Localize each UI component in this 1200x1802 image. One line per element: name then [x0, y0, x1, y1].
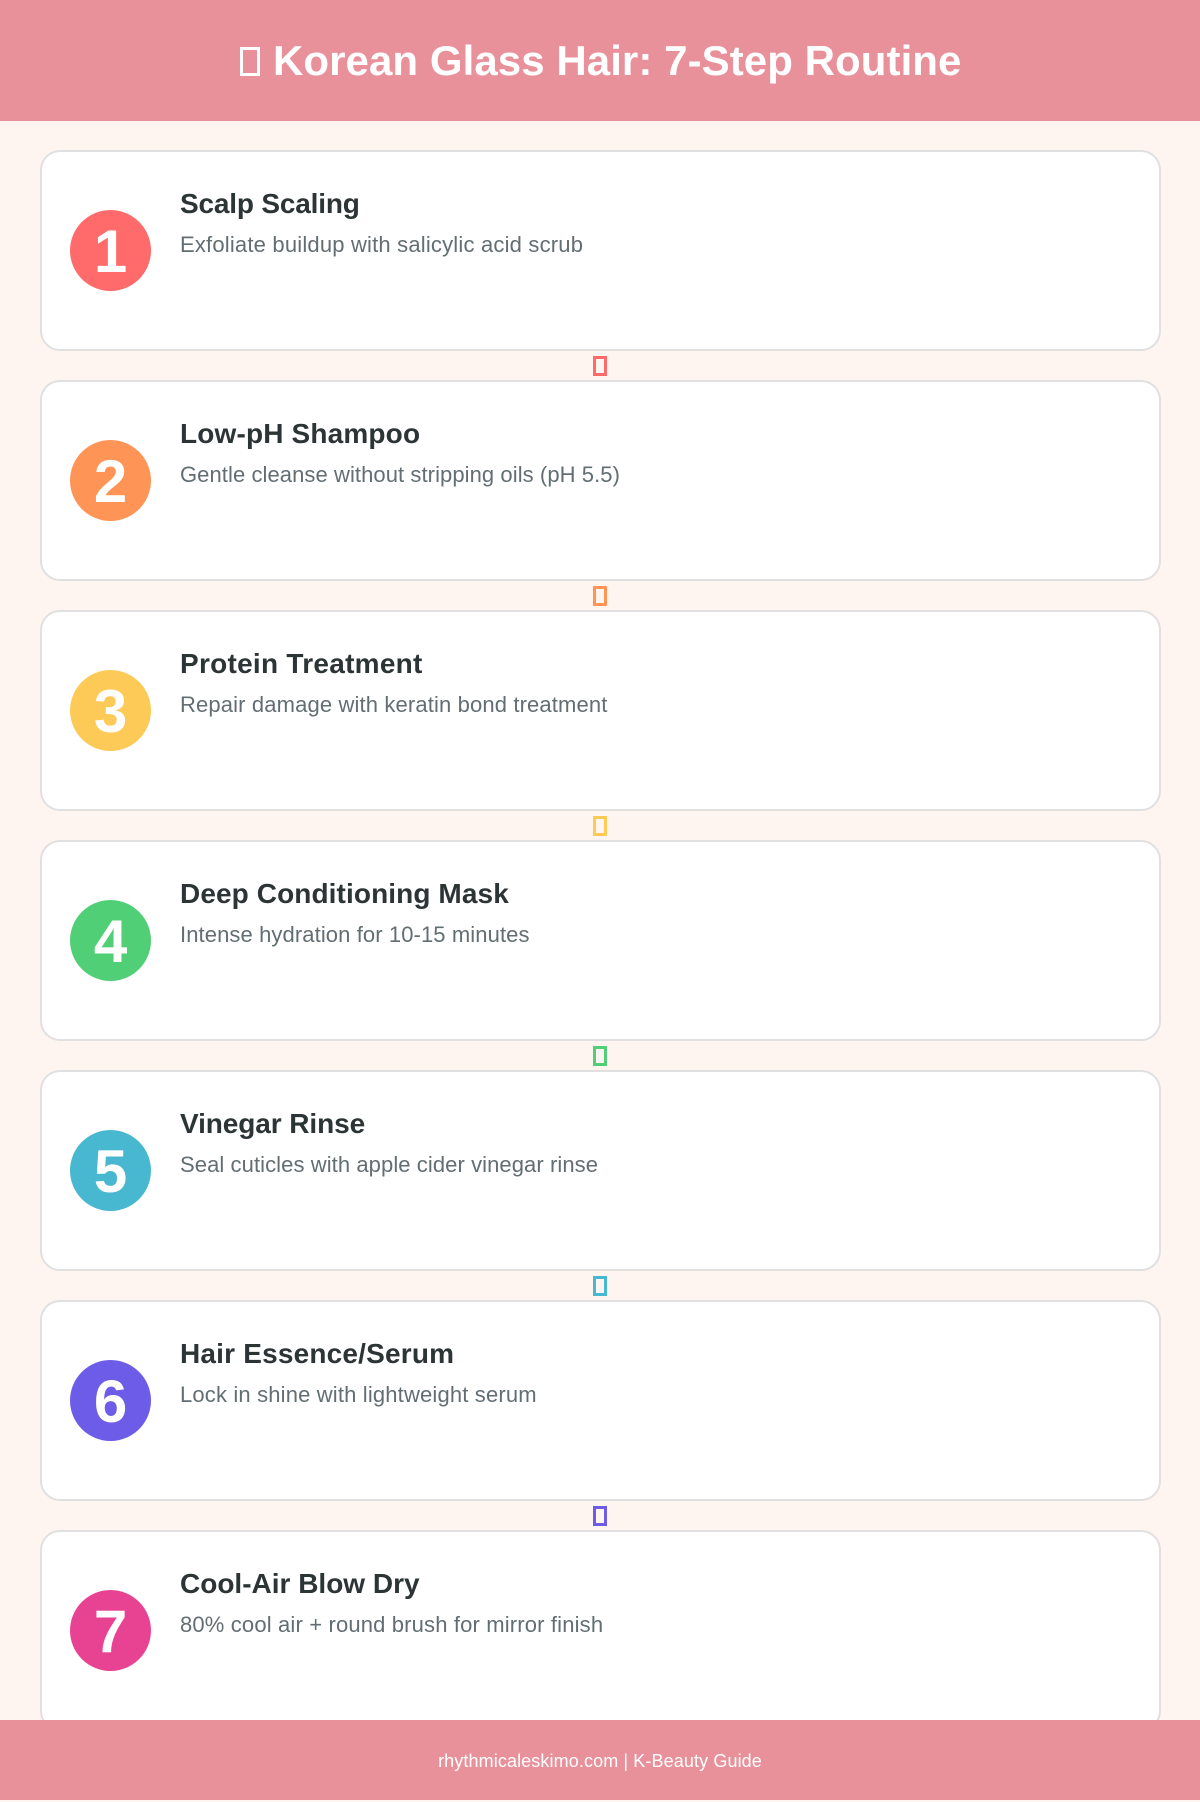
- step 1 description: Exfoliate buildup with salicylic acid scrub: [180, 232, 583, 257]
- step 6 description: Lock in shine with lightweight serum: [180, 1382, 537, 1407]
- arrow 1: [593, 356, 607, 376]
- step 4 description: Intense hydration for 10-15 minutes: [180, 922, 530, 947]
- panel: step 4: [40, 840, 1161, 1041]
- step 5 description: Seal cuticles with apple cider vinegar rinse: [180, 1152, 598, 1177]
- arrow 2: [593, 586, 607, 606]
- step 2 number badge: 2: [94, 448, 127, 515]
- arrow 3: [593, 816, 607, 836]
- arrow 6: [593, 1506, 607, 1526]
- step 6 heading: Hair Essence/Serum: [180, 1338, 454, 1369]
- step 5 number badge: [70, 1130, 151, 1211]
- step 1 number badge: [70, 210, 151, 291]
- step 7 number badge: [70, 1590, 151, 1671]
- step 6 number badge: [70, 1360, 151, 1441]
- step 2 heading: Low-pH Shampoo: [180, 418, 420, 449]
- panel: step 6: [40, 1300, 1161, 1501]
- step 4 number badge: 4: [94, 908, 127, 975]
- step 5 number badge: 5: [94, 1138, 127, 1205]
- header banner: [0, 0, 1200, 121]
- panel: step 5: [40, 1070, 1161, 1271]
- panel: step 1: [40, 150, 1161, 351]
- step 6 number badge: 6: [94, 1368, 127, 1435]
- panel: step 7: [40, 1530, 1161, 1731]
- footer: rhythmicaleskimo.com | K-Beauty Guide: [438, 1751, 762, 1771]
- step 1 number badge: 1: [94, 218, 127, 285]
- step 3 number badge: [70, 670, 151, 751]
- step 5 heading: Vinegar Rinse: [180, 1108, 365, 1139]
- step 3 heading: Protein Treatment: [180, 648, 423, 679]
- step 1 heading: Scalp Scaling: [180, 188, 360, 219]
- step 7 number badge: 7: [94, 1598, 127, 1665]
- step 4 number badge: [70, 900, 151, 981]
- title: Korean Glass Hair: 7-Step Routine: [273, 37, 961, 84]
- footer: [0, 1720, 1200, 1800]
- step 2 description: Gentle cleanse without stripping oils (pH 5.5): [180, 462, 620, 487]
- panel: step 3: [40, 610, 1161, 811]
- step 7 heading: Cool-Air Blow Dry: [180, 1568, 420, 1599]
- step 2 number badge: [70, 440, 151, 521]
- step 3 description: Repair damage with keratin bond treatment: [180, 692, 607, 717]
- step 7 description: 80% cool air + round brush for mirror finish: [180, 1612, 603, 1637]
- step 4 heading: Deep Conditioning Mask: [180, 878, 509, 909]
- step 3 number badge: 3: [94, 678, 127, 745]
- panel: step 2: [40, 380, 1161, 581]
- arrow 5: [593, 1276, 607, 1296]
- arrow 4: [593, 1046, 607, 1066]
